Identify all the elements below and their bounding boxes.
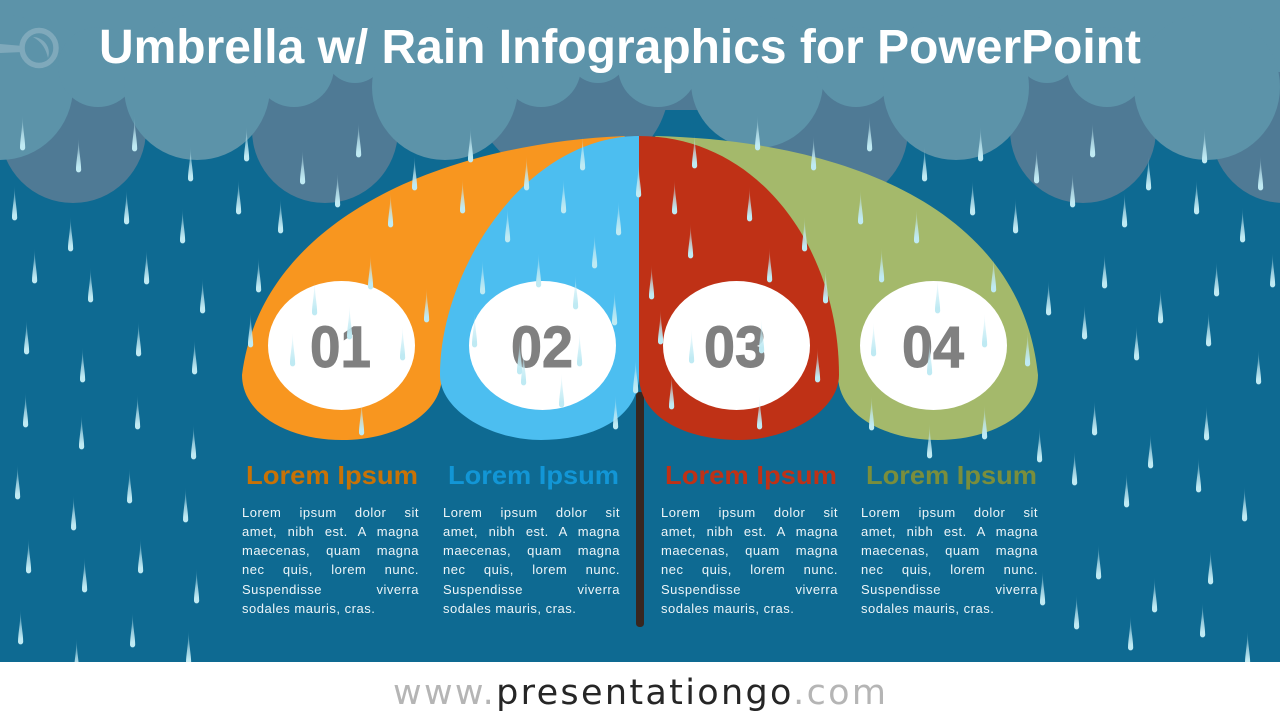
body text 2: amet, nibh est. A magna bbox=[443, 524, 620, 539]
badge 01 bbox=[268, 281, 415, 410]
badge 02: 02 bbox=[511, 315, 573, 380]
umbrella segment 3: red bbox=[639, 136, 839, 440]
body text 4: nec quis, lorem nunc. bbox=[861, 562, 1038, 577]
body text 4 bbox=[861, 504, 1038, 616]
umbrella segment 4: green bbox=[655, 136, 1038, 440]
badge 04 bbox=[860, 281, 1007, 410]
body text 2: sodales mauris, cras. bbox=[443, 601, 576, 616]
body text 3: amet, nibh est. A magna bbox=[661, 524, 838, 539]
icon: umbrella hook logo bbox=[0, 30, 56, 66]
heading 4: Lorem Ipsum bbox=[866, 460, 1037, 490]
body text 3: nec quis, lorem nunc. bbox=[661, 562, 838, 577]
body text 4: maecenas, quam magna bbox=[861, 543, 1038, 558]
body text 4: sodales mauris, cras. bbox=[861, 601, 994, 616]
body text 1: amet, nibh est. A magna bbox=[242, 524, 419, 539]
badge 01: 01 bbox=[310, 315, 371, 380]
back clouds bbox=[0, 0, 1280, 203]
rain drops bbox=[12, 115, 1275, 673]
badge 03: 03 bbox=[704, 315, 766, 380]
gap between back clouds bbox=[650, 120, 706, 140]
front clouds bbox=[0, 0, 1280, 160]
body text 3: maecenas, quam magna bbox=[661, 543, 838, 558]
heading 1: Lorem Ipsum bbox=[246, 460, 418, 490]
body text 1: sodales mauris, cras. bbox=[242, 601, 375, 616]
title: Umbrella w/ Rain Infographics for PowerPoint bbox=[99, 21, 1141, 74]
badge 03 bbox=[663, 281, 810, 410]
body text 1: Lorem ipsum dolor sit bbox=[242, 504, 419, 520]
body text 4: Lorem ipsum dolor sit bbox=[861, 504, 1038, 520]
body text 1: maecenas, quam magna bbox=[242, 543, 419, 558]
body text 4: amet, nibh est. A magna bbox=[861, 524, 1038, 539]
umbrella segment 1: orange bbox=[242, 136, 625, 440]
body text 1: nec quis, lorem nunc. bbox=[242, 562, 419, 577]
body text 2 bbox=[443, 504, 620, 616]
heading 3: Lorem Ipsum bbox=[665, 460, 837, 490]
body text 3: sodales mauris, cras. bbox=[661, 601, 794, 616]
body text 3 bbox=[661, 504, 838, 616]
body text 2: nec quis, lorem nunc. bbox=[443, 562, 620, 577]
footer url: www.presentationgo.com bbox=[393, 673, 886, 713]
body text 2: maecenas, quam magna bbox=[443, 543, 620, 558]
body text 2: Suspendisse viverra bbox=[443, 582, 620, 597]
body text 1: Suspendisse viverra bbox=[242, 582, 419, 597]
body text 2: Lorem ipsum dolor sit bbox=[443, 504, 620, 520]
umbrella segment 2: blue bbox=[440, 136, 640, 440]
body text 4: Suspendisse viverra bbox=[861, 582, 1038, 597]
badge 02 bbox=[469, 281, 616, 410]
badge 04: 04 bbox=[902, 315, 964, 380]
heading 2: Lorem Ipsum bbox=[448, 460, 619, 490]
body text 3: Suspendisse viverra bbox=[661, 582, 838, 597]
body text 1 bbox=[242, 504, 419, 616]
body text 3: Lorem ipsum dolor sit bbox=[661, 504, 838, 520]
footer bar bbox=[0, 662, 1280, 720]
umbrella handle bbox=[636, 392, 644, 627]
